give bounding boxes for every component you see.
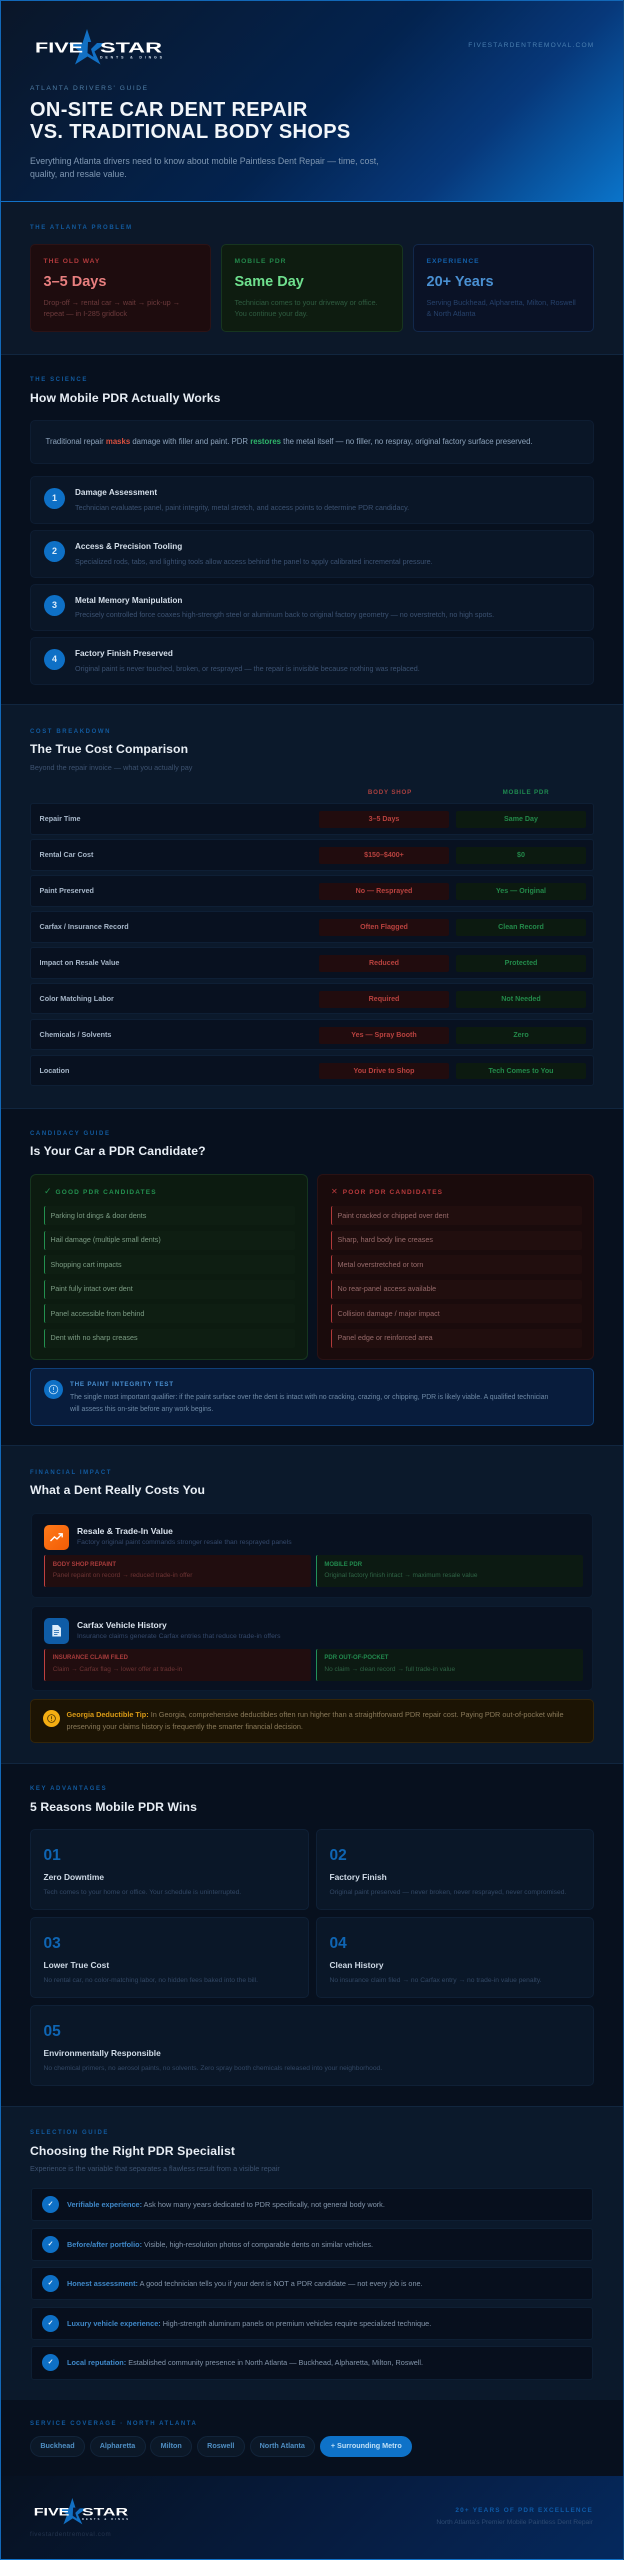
pill: Milton: [150, 2436, 192, 2457]
panel: good candidates: Paint fully intact over dent: [50, 1284, 133, 1293]
header: [0, 0, 624, 202]
step 3: Metal Memory Manipulation: [75, 596, 182, 605]
check item 4: [31, 2307, 593, 2340]
card 03: Lower True Cost: [44, 1960, 109, 1970]
title: VS. TRADITIONAL BODY SHOPS: [30, 121, 351, 143]
step 2: [30, 530, 594, 578]
row: location: You Drive to Shop: [354, 1067, 414, 1075]
card 01: Zero Downtime: [44, 1872, 104, 1882]
callout: paint integrity test: will assess this on-site before any work begins.: [70, 1406, 213, 1413]
logo: Five Star Dents & Dings: FIVE: [35, 39, 83, 56]
card: resale value: [31, 1513, 593, 1598]
card: mobile PDR: [221, 244, 403, 332]
row: color matching: Color Matching Labor: [40, 994, 114, 1003]
check item 3: [31, 2267, 593, 2300]
row: resale: Impact on Resale Value: [40, 958, 119, 967]
card: mobile PDR: MOBILE PDR: [234, 258, 286, 265]
check item 3: ✓: [48, 2280, 53, 2287]
column header: body shop: BODY SHOP: [368, 789, 412, 796]
card: carfax history: INSURANCE CLAIM FILED: [53, 1655, 128, 1661]
step 4: [30, 637, 594, 685]
card: mobile PDR: You continue your day.: [234, 309, 308, 318]
row: color matching: Not Needed: [501, 995, 541, 1003]
card: carfax history: Claim → Carfax flag → lower offer at trade-in: [53, 1666, 182, 1673]
row: chemicals: Yes — Spray Booth: [351, 1031, 417, 1039]
footer logo: [34, 2498, 128, 2524]
check item 5: Local reputation: Established community presence in North Atlanta — Buckhead, Alpharetta, Milton, Roswell.: [67, 2358, 423, 2367]
panel: good candidates: ✓ GOOD PDR CANDIDATES: [44, 1187, 157, 1197]
row: repair time: [30, 803, 594, 835]
row: rental car cost: Rental Car Cost: [40, 850, 93, 859]
card 05: Environmentally Responsible: [44, 2048, 161, 2058]
card: resale value: BODY SHOP REPAINT: [53, 1562, 116, 1568]
card 05: [30, 2005, 594, 2086]
panel: poor candidates: Sharp, hard body line creases: [338, 1235, 433, 1244]
icon: warning coin: [43, 1710, 60, 1727]
check item 2: Before/after portfolio: Visible, high-resolution photos of comparable dents on similar vehicles.: [67, 2240, 373, 2249]
row: paint preserved: [30, 875, 594, 907]
section label: COST BREAKDOWN: [30, 729, 111, 735]
card: experience: EXPERIENCE: [426, 258, 480, 265]
panel: poor candidates: [317, 1174, 594, 1360]
row: carfax: Clean Record: [498, 923, 544, 931]
step 1: [30, 476, 594, 524]
section: cost breakdown: [0, 704, 624, 1108]
card 03: 03: [44, 1935, 61, 1952]
card: resale value: MOBILE PDR: [324, 1562, 362, 1568]
card: experience: & North Atlanta: [426, 309, 476, 318]
icon: info circle: [44, 1380, 63, 1399]
card 01: [30, 1829, 308, 1910]
row: carfax: Often Flagged: [360, 923, 408, 931]
check item 3: Honest assessment: A good technician tells you if your dent is NOT a PDR candidate — not every job is one.: [67, 2279, 423, 2288]
step 3: 3: [52, 600, 57, 610]
pill: Alpharetta: Alpharetta: [100, 2441, 135, 2450]
pill: North Atlanta: [250, 2436, 315, 2457]
section: service coverage: [0, 2400, 624, 2476]
section label: CANDIDACY GUIDE: [30, 1131, 111, 1137]
pill: Buckhead: Buckhead: [40, 2441, 75, 2450]
check item 5: [31, 2346, 593, 2380]
card: carfax history: No claim → clean record → full trade-in value: [324, 1666, 455, 1673]
footer tagline: 20+ YEARS OF PDR EXCELLENCE: [455, 2507, 593, 2514]
card: the old way: Drop-off → rental car → wait → pick-up →: [44, 298, 180, 307]
row: carfax: Carfax / Insurance Record: [40, 922, 129, 931]
panel: poor candidates: Metal overstretched or torn: [338, 1260, 423, 1269]
row: repair time: Repair Time: [40, 814, 81, 823]
check item 5: ✓: [48, 2359, 53, 2366]
card 03: No rental car, no color-matching labor, no hidden fees baked into the bill.: [44, 1977, 258, 1984]
row: chemicals: Zero: [513, 1031, 529, 1039]
pill: Roswell: [197, 2436, 244, 2457]
row: resale: Reduced: [369, 959, 399, 967]
panel: good candidates: Hail damage (multiple small dents): [50, 1235, 161, 1244]
card: experience: 20+ Years: [426, 274, 494, 290]
row: chemicals: [30, 1019, 594, 1050]
card: carfax history: [31, 1606, 593, 1691]
row: location: [30, 1055, 594, 1086]
pill: Alpharetta: [90, 2436, 146, 2457]
card 04: [316, 1917, 594, 1998]
row: resale: Protected: [505, 959, 537, 967]
card 04: 04: [330, 1935, 347, 1952]
panel: poor candidates: Paint cracked or chipped over dent: [338, 1211, 449, 1220]
card 01: Tech comes to your home or office. Your schedule is uninterrupted.: [44, 1889, 241, 1896]
row: rental car cost: $150–$400+: [364, 851, 404, 859]
logo: Five Star Dents & Dings: STAR: [100, 39, 162, 56]
check item 4: ✓: [48, 2320, 53, 2327]
icon: document: [44, 1618, 69, 1644]
callout: paint integrity test: THE PAINT INTEGRITY TEST: [70, 1381, 174, 1388]
footer logo: STAR: [82, 2506, 128, 2518]
callout: Georgia deductible tip: preserving your claims history is frequently the smarter financial decision.: [66, 1722, 303, 1731]
callout: paint integrity test: [30, 1368, 594, 1426]
heading: The True Cost Comparison: [30, 742, 188, 756]
footer: [0, 2476, 624, 2560]
step 1: Technician evaluates panel, paint integrity, metal stretch, and access points to determine PDR candidacy.: [75, 503, 409, 512]
icon: trend arrow: [44, 1525, 69, 1550]
callout: Traditional repair masks damage with filler and paint. PDR restores the metal itself — no filler, no respray, original factory surface preserved.: [46, 437, 533, 446]
section label: THE SCIENCE: [30, 377, 88, 383]
card 02: Original paint preserved — never broken, never resprayed, never compromised.: [330, 1889, 566, 1896]
card 02: Factory Finish: [330, 1872, 387, 1882]
card: carfax history: Insurance claims generate Carfax entries that reduce trade-in offers: [77, 1633, 281, 1640]
row: chemicals: Chemicals / Solvents: [40, 1030, 111, 1039]
card: resale value: Panel repaint on record → reduced trade-in offer: [53, 1572, 192, 1579]
section label: SELECTION GUIDE: [30, 2130, 109, 2136]
card: the old way: repeat — in I-285 gridlock: [44, 309, 127, 318]
row: repair time: 3–5 Days: [369, 815, 399, 823]
card: resale value: Original factory finish intact → maximum resale value: [324, 1572, 478, 1579]
callout: [30, 420, 594, 464]
step 4: Factory Finish Preserved: [75, 649, 173, 658]
panel: good candidates: [30, 1174, 308, 1360]
row: paint preserved: Paint Preserved: [40, 886, 94, 895]
card: experience: Serving Buckhead, Alpharetta, Milton, Roswell: [426, 298, 576, 307]
card: carfax history: PDR OUT-OF-POCKET: [324, 1655, 388, 1661]
section: candidacy guide: [0, 1108, 624, 1445]
website url: FIVESTARDENTREMOVAL.COM: [468, 42, 594, 49]
section: selection guide: [0, 2106, 624, 2400]
check item 2: [31, 2228, 593, 2261]
step 2: 2: [52, 546, 57, 556]
row: carfax: [30, 911, 594, 943]
row: color matching: [30, 983, 594, 1014]
step 2: Specialized rods, tabs, and lighting tools allow access behind the panel to apply calibrated incremental pressure.: [75, 557, 433, 566]
check item 4: Luxury vehicle experience: High-strength aluminum panels on premium vehicles require specialized technique.: [67, 2319, 431, 2328]
card 01: 01: [44, 1847, 61, 1864]
section label: THE ATLANTA PROBLEM: [30, 225, 133, 231]
step 3: [30, 584, 594, 631]
card: mobile PDR: Same Day: [234, 274, 304, 290]
section: the Atlanta problem: [0, 202, 624, 354]
callout: paint integrity test: The single most important qualifier: if the paint surface over the dent is intact with no cracking, crazing, or chipping, PDR is likely viable. A qualified technician: [70, 1394, 548, 1401]
section label: SERVICE COVERAGE · NORTH ATLANTA: [30, 2421, 197, 2427]
panel: good candidates: Dent with no sharp creases: [50, 1333, 138, 1342]
panel: good candidates: Shopping cart impacts: [50, 1260, 122, 1269]
row: paint preserved: No — Resprayed: [356, 887, 412, 895]
section label: KEY ADVANTAGES: [30, 1786, 107, 1792]
card: resale value: Resale & Trade-In Value: [77, 1526, 173, 1536]
column header: mobile PDR: MOBILE PDR: [503, 789, 549, 796]
pill: surrounding metro: [320, 2436, 412, 2457]
title: [30, 99, 351, 143]
heading: How Mobile PDR Actually Works: [30, 391, 220, 405]
section label: FINANCIAL IMPACT: [30, 1470, 112, 1476]
row: color matching: Required: [369, 995, 399, 1003]
logo: Five Star Dents & Dings: [35, 29, 163, 64]
step 4: 4: [52, 654, 57, 664]
check item 1: ✓: [48, 2201, 53, 2208]
step 4: Original paint is never touched, broken, or resprayed — the repair is invisible because nothing was replaced.: [75, 664, 420, 673]
panel: poor candidates: Collision damage / major impact: [338, 1309, 440, 1318]
panel: good candidates: Parking lot dings & door dents: [50, 1211, 146, 1220]
card: the old way: 3–5 Days: [44, 274, 106, 290]
panel: poor candidates: Panel edge or reinforced area: [338, 1333, 433, 1342]
row: rental car cost: [30, 839, 594, 871]
footer logo: FIVE: [34, 2506, 69, 2518]
card 04: No insurance claim filed → no Carfax entry → no trade-in value penalty.: [330, 1977, 542, 1984]
footer logo: DENTS & DINGS: [82, 2517, 128, 2521]
check item 1: Verifiable experience: Ask how many years dedicated to PDR specifically, not general body work.: [67, 2200, 385, 2209]
pill: Roswell: Roswell: [207, 2441, 234, 2450]
section: the science: [0, 354, 624, 704]
panel: good candidates: Panel accessible from behind: [50, 1309, 144, 1318]
footer url: fivestardentremoval.com: [30, 2531, 111, 2538]
panel: poor candidates: No rear-panel access available: [338, 1284, 436, 1293]
section: financial impact: [0, 1445, 624, 1763]
subtitle: quality, and resale value.: [30, 168, 127, 178]
card: resale value: Factory original paint commands stronger resale than resprayed panels: [77, 1539, 292, 1546]
card 02: [316, 1829, 594, 1910]
row: resale: [30, 947, 594, 979]
row: paint preserved: Yes — Original: [496, 887, 546, 895]
panel: poor candidates: ✕ POOR PDR CANDIDATES: [331, 1187, 443, 1196]
logo: Five Star Dents & Dings: DENTS & DINGS: [100, 55, 163, 59]
step 1: Damage Assessment: [75, 488, 157, 497]
card: carfax history: Carfax Vehicle History: [77, 1620, 167, 1630]
subheading: Beyond the repair invoice — what you actually pay: [30, 763, 192, 772]
row: location: Location: [40, 1066, 69, 1075]
card: experience: [413, 244, 594, 332]
card 02: 02: [330, 1847, 347, 1864]
card: the old way: [30, 244, 211, 332]
step 1: 1: [52, 493, 57, 503]
card: the old way: THE OLD WAY: [44, 258, 100, 265]
row: repair time: Same Day: [504, 815, 538, 823]
heading: Is Your Car a PDR Candidate?: [30, 1144, 206, 1158]
heading: 5 Reasons Mobile PDR Wins: [30, 1800, 197, 1814]
subheading: Experience is the variable that separates a flawless result from a visible repair: [30, 2164, 280, 2173]
pill: North Atlanta: North Atlanta: [260, 2441, 305, 2450]
card 05: No chemical primers, no aerosol paints, no solvents. Zero spray booth chemicals released into your neighborhood.: [44, 2065, 382, 2072]
row: rental car cost: $0: [517, 851, 525, 859]
heading: What a Dent Really Costs You: [30, 1483, 205, 1497]
card 03: [30, 1917, 308, 1998]
card 04: Clean History: [330, 1960, 384, 1970]
footer subline: North Atlanta's Premier Mobile Paintless Dent Repair: [436, 2519, 593, 2526]
card: mobile PDR: Technician comes to your driveway or office.: [234, 298, 378, 307]
title: ON-SITE CAR DENT REPAIR: [30, 99, 308, 121]
subtitle: [30, 156, 379, 179]
card 05: 05: [44, 2023, 61, 2040]
check item 1: [31, 2188, 593, 2221]
section: key advantages: [0, 1763, 624, 2106]
callout: Georgia deductible tip: Georgia Deductible Tip: In Georgia, comprehensive deductibles often run higher than a straightforward PDR repair cost. Paying PDR out-of-pocket while: [66, 1710, 564, 1719]
step 2: Access & Precision Tooling: [75, 542, 182, 551]
eyebrow: ATLANTA DRIVERS' GUIDE: [30, 84, 149, 92]
subtitle: Everything Atlanta drivers need to know about mobile Paintless Dent Repair — time, cost,: [30, 156, 379, 166]
callout: Georgia deductible tip: [30, 1699, 594, 1743]
row: location: Tech Comes to You: [488, 1067, 554, 1075]
step 3: Precisely controlled force coaxes high-strength steel or aluminum back to original factory geometry — no overstretch, no high spots.: [75, 610, 494, 619]
pill: Milton: Milton: [161, 2441, 182, 2450]
check item 2: ✓: [48, 2241, 53, 2248]
pill: surrounding metro: + Surrounding Metro: [331, 2441, 402, 2450]
heading: Choosing the Right PDR Specialist: [30, 2144, 235, 2158]
pill: Buckhead: [30, 2436, 85, 2457]
